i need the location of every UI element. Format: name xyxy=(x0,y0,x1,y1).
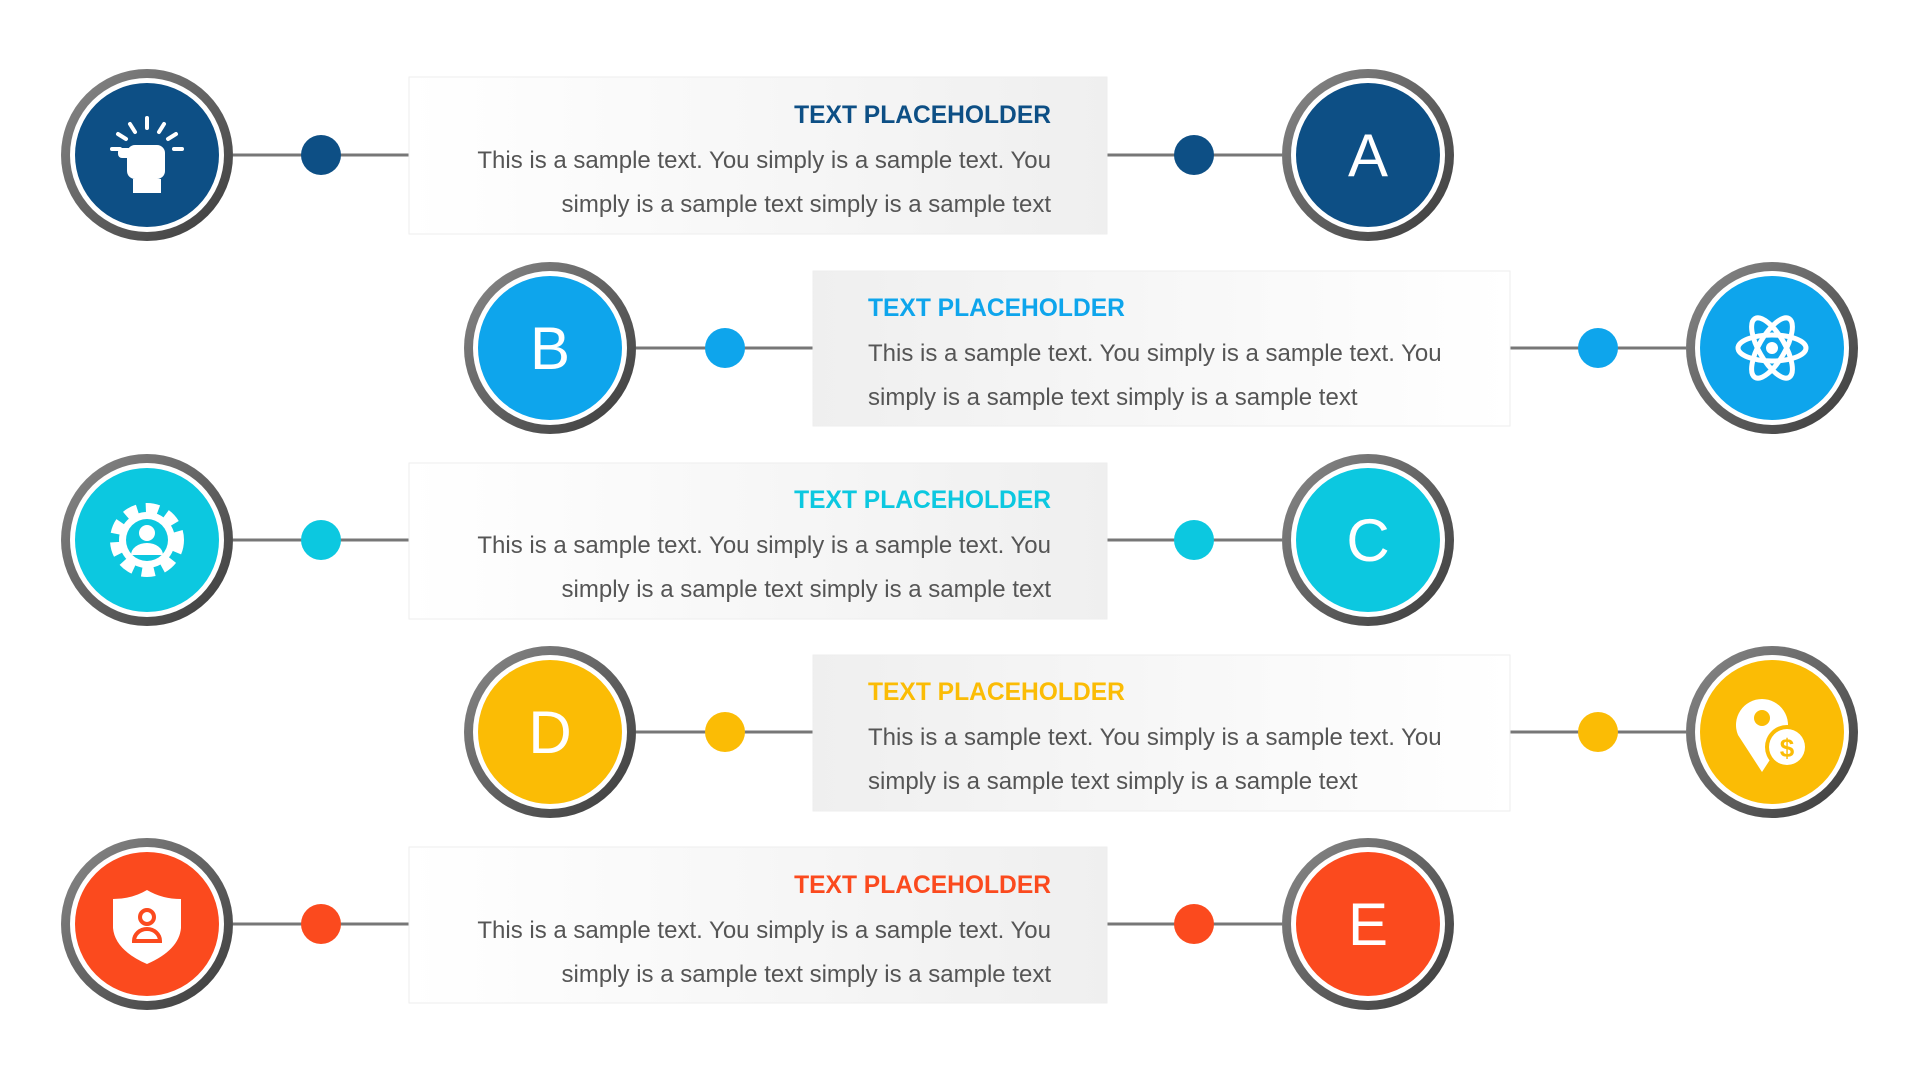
row D xyxy=(464,646,1858,818)
icon circle: shield user xyxy=(61,838,233,1010)
row C xyxy=(61,454,1454,626)
text box C: This is a sample text. You simply is a sample text. You xyxy=(477,532,1051,559)
text box B: This is a sample text. You simply is a sample text. You xyxy=(868,340,1442,367)
icon circle: fist xyxy=(61,69,233,241)
letter circle B: B xyxy=(530,315,570,382)
letter circle A: A xyxy=(1348,122,1388,189)
text box E: simply is a sample text simply is a sample text xyxy=(562,961,1051,988)
letter circle D: D xyxy=(528,699,572,766)
text box D: This is a sample text. You simply is a sample text. You xyxy=(868,724,1442,751)
letter circle B xyxy=(464,262,636,434)
letter circle C xyxy=(1282,454,1454,626)
text box D: simply is a sample text simply is a sample text xyxy=(868,768,1358,795)
text box E: This is a sample text. You simply is a sample text. You xyxy=(477,917,1051,944)
letter circle E xyxy=(1282,838,1454,1010)
text box A xyxy=(409,77,1107,234)
text box C: simply is a sample text simply is a sample text xyxy=(562,576,1051,603)
row E xyxy=(61,838,1454,1010)
letter circle A xyxy=(1282,69,1454,241)
connector lines xyxy=(233,155,1686,924)
icon circle: location dollar xyxy=(1686,646,1858,818)
text box A: This is a sample text. You simply is a sample text. You xyxy=(477,147,1051,174)
row B xyxy=(464,262,1858,434)
text box C: TEXT PLACEHOLDER xyxy=(794,487,1051,514)
text box E: TEXT PLACEHOLDER xyxy=(794,872,1051,899)
dot xyxy=(301,135,341,175)
text box D xyxy=(813,655,1510,811)
text box E xyxy=(409,847,1107,1003)
text box A: TEXT PLACEHOLDER xyxy=(794,102,1051,129)
letter circle C: C xyxy=(1346,507,1390,574)
text box B: TEXT PLACEHOLDER xyxy=(868,295,1125,322)
text box D: TEXT PLACEHOLDER xyxy=(868,679,1125,706)
icon circle: location dollar: $ xyxy=(1780,733,1795,763)
row A xyxy=(61,69,1454,241)
icon circle: atom xyxy=(1686,262,1858,434)
letter circle D xyxy=(464,646,636,818)
text box A: simply is a sample text simply is a sample text xyxy=(562,191,1051,218)
text box B: simply is a sample text simply is a sample text xyxy=(868,384,1358,411)
icon circle: gear user xyxy=(61,454,233,626)
text box C xyxy=(409,463,1107,619)
text box B xyxy=(813,271,1510,426)
letter circle E: E xyxy=(1348,891,1388,958)
